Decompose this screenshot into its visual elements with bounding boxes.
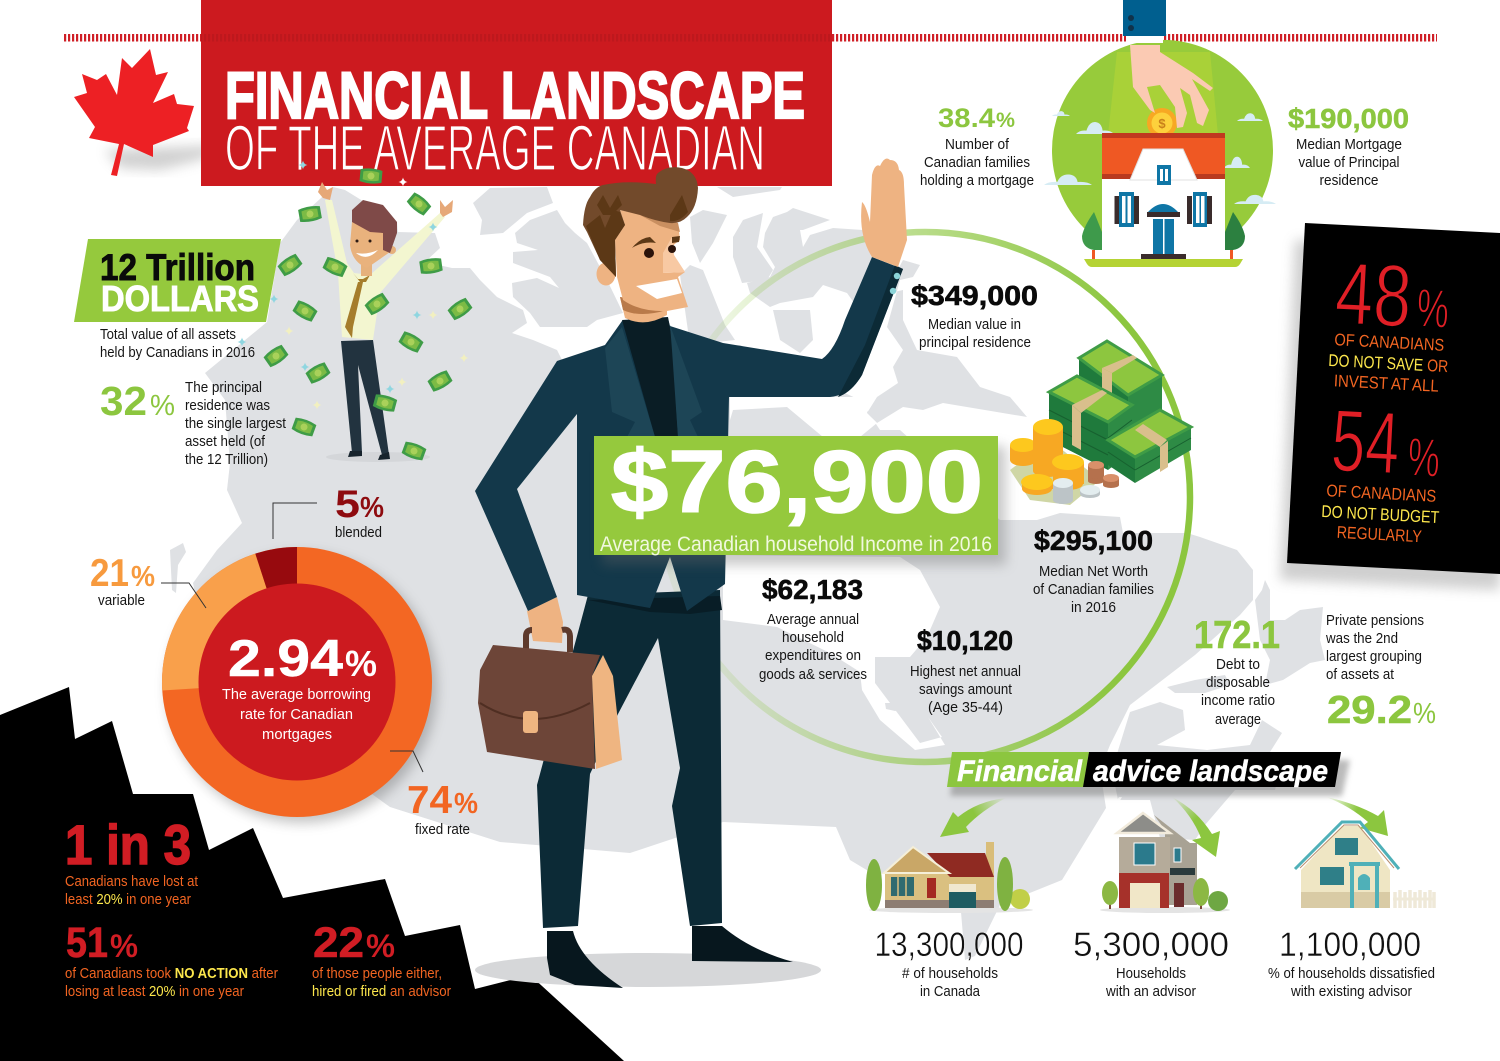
10,120 stat: Highest net annual (910, 664, 1021, 680)
house and coin illustration: $ (1158, 116, 1166, 131)
house and coin illustration (1044, 0, 1276, 267)
financial advice banner: Financial (957, 755, 1083, 788)
financial advice banner (947, 752, 1341, 788)
10,120 stat: $10,120 (917, 625, 1013, 656)
32 percent stat: % (150, 390, 175, 422)
donut chart mortgages: rate for Canadian (240, 707, 353, 723)
donut chart mortgages: mortgages (262, 727, 332, 743)
donut centre value: 2.94 (228, 630, 343, 688)
62,183 stat (759, 574, 867, 683)
190,000 mortgage stat: Median Mortgage (1296, 137, 1402, 153)
190,000 mortgage stat (1288, 103, 1409, 189)
total value text: held by Canadians in 2016 (100, 345, 255, 361)
51 percent stat: of Canadians took NO ACTION after (65, 966, 278, 982)
donut chart mortgages: The average borrowing (222, 687, 371, 703)
principal residence text: The principal (185, 380, 262, 396)
private pensions stat: was the 2nd (1325, 631, 1398, 647)
total value text (100, 327, 255, 361)
label 21 percent variable: % (131, 561, 155, 593)
principal residence text: the single largest (185, 416, 286, 432)
38.4 percent stat: holding a mortgage (920, 173, 1034, 189)
22 percent stat: 22 (313, 919, 364, 967)
trousers (537, 590, 722, 928)
172.1 debt ratio: income ratio (1201, 693, 1275, 709)
51 percent stat: 51 (66, 919, 108, 967)
principal residence text (185, 380, 286, 468)
black panel shadow (1280, 240, 1500, 590)
small man with raining money (318, 182, 453, 462)
172.1 debt ratio: Debt to (1216, 657, 1260, 673)
income box: $76,900 (611, 432, 983, 531)
22 percent stat: hired or fired an advisor (312, 984, 451, 1000)
label 21 percent variable: 21 (90, 552, 129, 595)
black mountain background (0, 687, 624, 1061)
label 5 percent blended: % (360, 492, 384, 524)
12 trillion green tag: DOLLARS (101, 278, 259, 319)
13,300,000 households stat: 13,300,000 (874, 926, 1024, 964)
total value text: Total value of all assets (100, 327, 236, 343)
arrow to house two (1172, 797, 1220, 857)
black panel: OF CANADIANS (1334, 330, 1445, 355)
hair (583, 167, 698, 277)
5,300,000 households stat: Households (1116, 966, 1186, 982)
38.4 percent stat: 38.4 (938, 103, 995, 133)
gold coin stacks (1010, 419, 1084, 495)
38.4 percent stat: Canadian families (924, 155, 1030, 171)
decorative stripe rule (64, 34, 1437, 42)
172.1 debt ratio: average (1215, 712, 1261, 728)
jacket body and arms (475, 257, 903, 611)
principal residence text: the 12 Trillion) (185, 452, 268, 468)
coin (1147, 108, 1177, 138)
label 5 percent blended (335, 483, 384, 541)
house one (866, 842, 1033, 913)
private pensions stat (1325, 613, 1436, 732)
Hudson Bay cut-out (723, 555, 945, 750)
money bills (238, 160, 473, 462)
51 percent stat: losing at least 20% in one year (65, 984, 244, 1000)
172.1 debt ratio (1194, 614, 1280, 728)
shoes (547, 931, 623, 988)
label 74 percent fixed: fixed rate (415, 822, 470, 838)
arrow to house three (1326, 797, 1388, 836)
190,000 mortgage stat: residence (1320, 173, 1378, 189)
51 percent stat: % (110, 928, 138, 964)
1 in 3 stat: least 20% in one year (65, 892, 191, 908)
donut chart mortgages (162, 547, 437, 823)
principal residence text: residence was (185, 398, 270, 414)
190,000 mortgage stat: $190,000 (1288, 103, 1409, 134)
38.4 percent stat: % (996, 109, 1015, 132)
label 5 percent blended: 5 (335, 483, 360, 526)
house three (1295, 822, 1435, 908)
title line one: FINANCIAL LANDSCAPE (225, 58, 805, 132)
51 percent stat (65, 919, 278, 1000)
label 74 percent fixed: % (454, 788, 478, 820)
donut chart mortgages: % (345, 643, 377, 684)
349,000 stat: Median value in (928, 317, 1021, 333)
1,100,000 households stat: 1,100,000 (1279, 926, 1421, 964)
295,100 stat (1033, 525, 1154, 616)
22 percent stat: of those people either, (312, 966, 442, 982)
black panel: DO NOT BUDGET (1321, 502, 1440, 527)
black panel (1287, 223, 1500, 574)
private pensions stat: of assets at (1326, 667, 1394, 683)
349,000 stat (911, 280, 1038, 351)
green circle (1052, 40, 1273, 232)
briefcase (478, 630, 622, 769)
black panel: OF CANADIANS (1326, 481, 1437, 506)
10,120 stat: (Age 35-44) (928, 700, 1003, 716)
295,100 stat: $295,100 (1034, 525, 1153, 556)
black panel: REGULARLY (1336, 523, 1422, 546)
left hand (527, 597, 563, 643)
5,300,000 households stat: with an advisor (1105, 984, 1196, 1000)
1 in 3 stat: Canadians have lost at (65, 874, 198, 890)
13,300,000 households stat: # of households (902, 966, 998, 982)
1 in 3 stat (65, 813, 198, 908)
62,183 stat: Average annual (767, 612, 859, 628)
man ground shadow (475, 953, 821, 987)
black panel: % (1415, 278, 1450, 340)
house two (1100, 813, 1230, 913)
172.1 debt ratio: disposable (1206, 675, 1270, 691)
clouds (1052, 111, 1070, 116)
295,100 stat: of Canadian families (1033, 582, 1154, 598)
map of Canada background (170, 187, 1325, 960)
1,100,000 households stat: % of households dissatisfied (1268, 966, 1435, 982)
48 percent: 48 (1333, 243, 1414, 346)
label 21 percent variable: variable (98, 593, 145, 609)
22 percent stat: % (366, 928, 395, 964)
label 74 percent fixed (407, 779, 478, 838)
private pensions stat: 29.2 (1327, 689, 1412, 732)
12 trillion green tag (74, 239, 281, 322)
32 percent stat: 32 (100, 378, 147, 424)
income box (594, 432, 998, 556)
22 percent stat (312, 919, 451, 1000)
1,100,000 households stat: with existing advisor (1290, 984, 1412, 1000)
principal residence text: asset held (of (185, 434, 266, 450)
5,300,000 households stat (1073, 926, 1229, 1000)
private pensions stat: largest grouping (1326, 649, 1422, 665)
title line two: OF THE AVERAGE CANADIAN (225, 112, 765, 184)
white house (1102, 178, 1225, 258)
38.4 percent stat: Number of (945, 137, 1010, 153)
silver and copper coins (1053, 461, 1119, 504)
62,183 stat: goods a& services (759, 667, 867, 683)
financial advice banner shadow (950, 760, 1350, 796)
lapels (605, 327, 655, 437)
172.1 debt ratio: 172.1 (1194, 614, 1280, 657)
raised hand (861, 158, 907, 267)
neck and face (620, 297, 667, 322)
62,183 stat: household (782, 630, 844, 646)
54 percent: 54 (1329, 390, 1402, 493)
label 21 percent variable (90, 552, 155, 609)
295,100 stat: in 2016 (1071, 600, 1116, 616)
5,300,000 households stat: 5,300,000 (1073, 926, 1229, 964)
295,100 stat: Median Net Worth (1039, 564, 1148, 580)
349,000 stat: $349,000 (911, 280, 1038, 311)
black panel: DO NOT SAVE OR (1328, 351, 1449, 376)
12 trillion green tag: 12 Trillion (100, 247, 255, 288)
cash bundles (1049, 341, 1191, 483)
10,120 stat: savings amount (919, 682, 1012, 698)
large green ring (660, 232, 1190, 762)
money and coins pile (1010, 341, 1191, 505)
10,120 stat (910, 625, 1021, 716)
turtleneck (622, 317, 678, 437)
white channel cut-outs (730, 397, 877, 437)
38.4 percent stat (920, 103, 1034, 189)
financial advice banner: advice landscape (1093, 755, 1328, 788)
1,100,000 households stat (1268, 926, 1435, 1000)
32 percent stat (100, 378, 175, 424)
349,000 stat: principal residence (919, 335, 1031, 351)
label 5 percent blended: blended (335, 525, 382, 541)
private pensions stat: % (1413, 698, 1436, 730)
main character (475, 158, 907, 988)
maple leaf with shadow (74, 49, 225, 176)
hand with cuff (1123, 0, 1166, 36)
income box shadow (602, 446, 1006, 565)
13,300,000 households stat (874, 926, 1024, 1000)
black panel: INVEST AT ALL (1333, 371, 1439, 396)
62,183 stat: expenditures on (765, 648, 861, 664)
title banner (201, 0, 832, 186)
1 in 3 stat: 1 in 3 (65, 813, 191, 876)
13,300,000 households stat: in Canada (920, 984, 981, 1000)
arrow to house one (940, 798, 1006, 837)
donut leader lines (161, 503, 423, 772)
label 74 percent fixed: 74 (407, 779, 452, 822)
ground and trees (1084, 259, 1243, 267)
black panel: % (1406, 427, 1441, 489)
190,000 mortgage stat: value of Principal (1298, 155, 1400, 171)
62,183 stat: $62,183 (762, 574, 863, 605)
income box: Average Canadian household Income in 2016 (600, 533, 992, 556)
private pensions stat: Private pensions (1326, 613, 1424, 629)
